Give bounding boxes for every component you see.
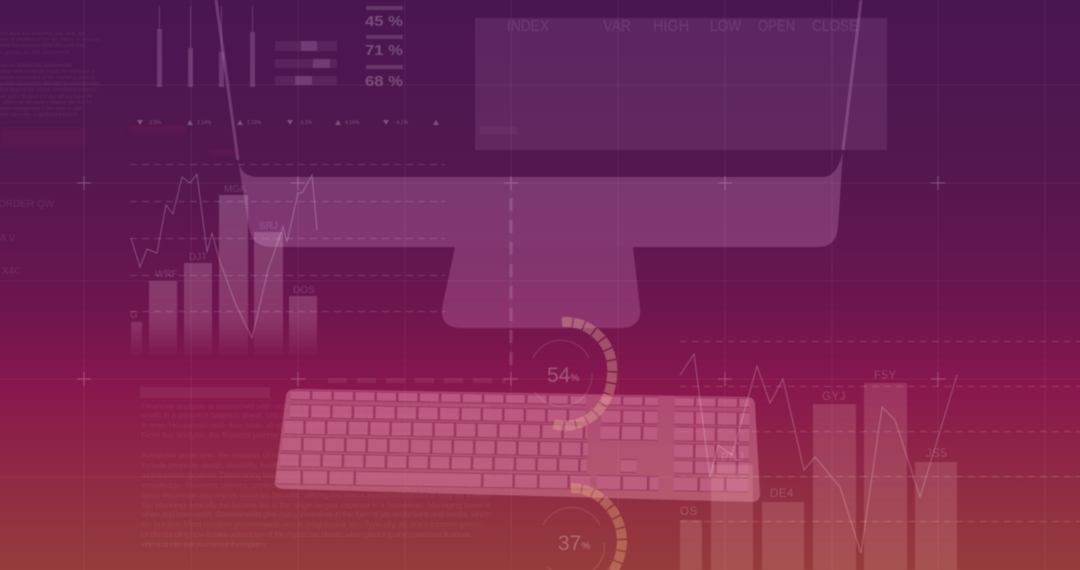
financial text block: which it can later save you money in the long term. [140, 539, 266, 549]
left bar labels [130, 184, 315, 321]
left text block: ver and a decision of it you will pay taxes for [0, 94, 92, 100]
percentage stats [365, 6, 403, 90]
table headers: OPEN [758, 18, 795, 35]
ticker row: -3.2% [299, 120, 313, 126]
left bar labels: DOS [293, 285, 315, 296]
keyboard [275, 389, 760, 502]
right bar labels [680, 370, 947, 518]
table headers: INDEX [507, 18, 549, 35]
left text block: patient processing of the market to price at [0, 75, 96, 81]
right bar labels: OS [680, 506, 698, 518]
monitor [216, 0, 861, 328]
left bar labels: DJT [189, 252, 207, 263]
left text block: over can make a significant impact in [0, 112, 78, 118]
ticker row: 1.16% [247, 120, 262, 126]
left text block: good management of the return to start [0, 106, 83, 112]
monitor stand [442, 247, 640, 328]
left bar labels: WRF [155, 269, 178, 280]
financial text block: Financial analysis is concerned with understanding the flow of money over time and how it builds [141, 401, 491, 411]
gauge 37 percent: 37 [558, 532, 581, 555]
ticker row: -4.1% [395, 120, 409, 126]
data table panel [475, 18, 887, 150]
financial text block: Understanding how to take advantage of the myriad tax breaks when planning one's personal finances [141, 529, 471, 539]
table headers: LOW [710, 18, 742, 35]
left text block: portfolio adjustment is alternative general information [0, 81, 100, 87]
ticker row: 4.16% [345, 120, 360, 126]
left bar chart [130, 184, 317, 358]
percentage stats: 68 % [365, 73, 403, 90]
candlestick chart [157, 6, 255, 87]
monitor chin [238, 150, 843, 247]
table headers [507, 18, 858, 35]
left text block: can be divided into fundamental [0, 63, 72, 69]
range bars [275, 41, 337, 85]
financial text block: when and how much. Governments give many incentives in the form of tax deductions and credits, which [140, 509, 491, 519]
left text block: , which can be used in finance the first for [0, 100, 92, 106]
left text block: that beyond the actual, investment property [0, 87, 98, 93]
monitor bezel edges [216, 0, 861, 160]
left bar labels: MGK [224, 184, 247, 195]
grid crosshairs [77, 176, 945, 386]
key gaps [276, 395, 750, 485]
gauge 54 percent: % [570, 373, 579, 384]
financial text block: tax burden. Most modern governments use a progressive tax. Typically, as one's income grows [141, 519, 481, 529]
right bar labels: PNJ [721, 452, 744, 464]
left text block: ces work and investing your time, but [0, 31, 86, 37]
keys [276, 395, 750, 485]
percentage stats: 71 % [365, 42, 403, 59]
right line chart [680, 354, 957, 553]
financial text block: include property, death, disability, health and long term care. Some of these risks may be managed [141, 460, 491, 470]
right bar labels: F5Y [874, 370, 897, 382]
blurred highlights [0, 126, 235, 155]
vertical dashed marker [509, 198, 513, 372]
financial text block: worth in a person's balance sheet, calculated by adding assets and subtracting liabilities at a point [140, 410, 492, 420]
ticker row: -2.5% [148, 120, 162, 126]
financial text block [140, 387, 492, 549]
table headers: CLOSE [812, 18, 858, 35]
ticker row: 2.14% [197, 120, 212, 126]
table headers: HIGH [653, 18, 689, 35]
ticker row [137, 120, 439, 126]
financial text block: Adequate protection: the analysis of how to protect a household from unforeseen risks, these risks [141, 450, 491, 460]
table headers: VAR [603, 18, 631, 35]
financial text block: Since insurance also enjoys some tax benefits, utilizing insurance investment products may be a piece [141, 490, 491, 500]
right bar labels: DE4 [770, 488, 794, 500]
right bar chart [680, 370, 957, 570]
left bar labels: SRJ [259, 221, 278, 232]
gauge 54 percent [533, 322, 612, 426]
left line chart [131, 174, 317, 338]
right bar labels: JS5 [926, 448, 947, 460]
gauge 54 percent: 54 [547, 364, 570, 387]
left text block: one of smallest of the tax return, in account [0, 37, 101, 43]
financial text block: From this analysis, the financial planner can determine to what degree goals can be met. [141, 430, 451, 440]
left bar labels: G [130, 310, 138, 321]
left text block [0, 31, 101, 118]
left text block: it grows on the investment. [0, 50, 72, 56]
left axis labels [0, 199, 55, 277]
financial text block: as insurance expense. Determining how much insurance to get at the most cost effective terms requires [141, 470, 491, 480]
left axis labels: X4C [2, 266, 21, 277]
gauge 37 percent [543, 488, 622, 570]
financial text block: in time. Household cash flow totals all of the expected sources of income and expenses in one year [141, 420, 491, 430]
percentage stats: 45 % [365, 13, 403, 30]
financial text block: knowledge. Business owners, professionals, athletes and entertainers require specialized advice [141, 480, 491, 490]
left text block: study what event will impact the purchase of [0, 69, 96, 75]
left text block: ment the investors within the same way [0, 43, 86, 49]
right bar labels: GYJ [822, 391, 846, 403]
left axis labels: A V [0, 233, 16, 244]
gauge 37 percent: % [581, 541, 590, 552]
financial text block: Tax planning: typically the income tax is the single largest expense in a household. Managing taxes is [141, 500, 491, 510]
